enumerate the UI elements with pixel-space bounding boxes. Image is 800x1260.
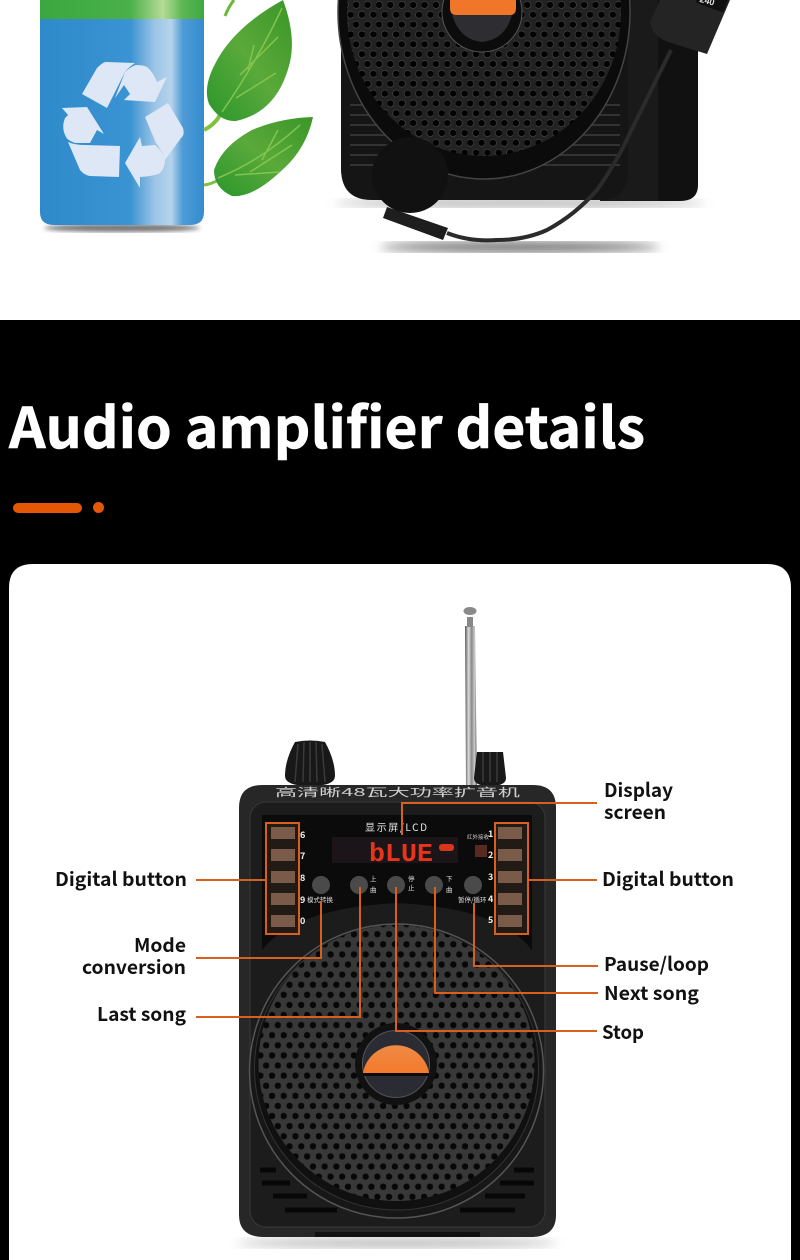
button captions: 止 [408, 882, 415, 892]
left digit numbers: 0 [300, 914, 305, 927]
top white product section [0, 0, 800, 320]
right digit numbers: 2 [488, 848, 493, 861]
orange indicator lens [355, 1023, 437, 1105]
black details section background [0, 320, 800, 1260]
right digit buttons [495, 823, 528, 934]
button captions: 停 [408, 873, 415, 883]
button captions: 暂停/循环 [458, 894, 487, 904]
control panel [262, 815, 532, 950]
lcd caption: 显示屏/LCD [365, 819, 427, 834]
button captions [307, 873, 487, 904]
left digit numbers: 8 [300, 871, 305, 884]
label: display screen: screen [604, 798, 666, 825]
orange accent marker [13, 502, 104, 513]
label: stop: Stop [602, 1018, 644, 1045]
button captions: 曲 [370, 884, 376, 894]
amplifier with headset microphone [335, 0, 730, 252]
callout lines [196, 803, 598, 1031]
white panel [9, 564, 791, 1260]
amplifier front view [237, 607, 557, 1248]
label: display screen [604, 776, 673, 825]
battery with recycling symbol [40, 0, 204, 232]
brand strip text: 高清晰48瓦大功率扩音机 [275, 784, 520, 800]
right digit numbers: 3 [488, 870, 493, 883]
right digit numbers: 5 [488, 913, 493, 926]
left digit numbers: 6 [300, 828, 305, 841]
tuning knob [474, 752, 506, 786]
microphone foam and boom [372, 0, 730, 240]
right digit numbers: 4 [488, 892, 494, 905]
left digit numbers: 7 [300, 849, 305, 862]
left digit numbers [300, 828, 305, 927]
infrared receiver: 红外接收 [467, 833, 490, 841]
button captions: 上 [370, 873, 377, 883]
right digit numbers: 1 [488, 827, 493, 840]
left digit numbers: 9 [300, 893, 305, 906]
body [239, 785, 556, 1237]
button captions: 模式转换 [307, 894, 334, 904]
infrared receiver [467, 833, 490, 857]
label: mode conversion: Mode [134, 931, 186, 958]
round control buttons [312, 876, 482, 894]
label: pause loop: Pause/loop [604, 950, 709, 977]
label: last song: Last song [97, 1000, 187, 1027]
label: display screen: Display [604, 776, 673, 803]
leaves [204, 0, 313, 196]
button captions: 下 [446, 873, 453, 883]
volume knob [285, 740, 335, 786]
title: Audio amplifier details [8, 384, 645, 465]
speaker grille [250, 924, 544, 1218]
label: digital button left: Digital button [55, 865, 187, 892]
left digit buttons [266, 823, 299, 934]
right digit numbers [488, 827, 494, 926]
label: digital button right: Digital button [602, 865, 734, 892]
antenna [464, 607, 477, 786]
label: next song: Next song [604, 979, 700, 1006]
lcd display [332, 837, 458, 869]
lcd display: bLUE [369, 839, 433, 869]
label: mode conversion: conversion [82, 953, 186, 980]
button captions: 曲 [446, 884, 452, 894]
speaker vents [260, 1170, 534, 1210]
label: mode conversion [82, 931, 186, 980]
